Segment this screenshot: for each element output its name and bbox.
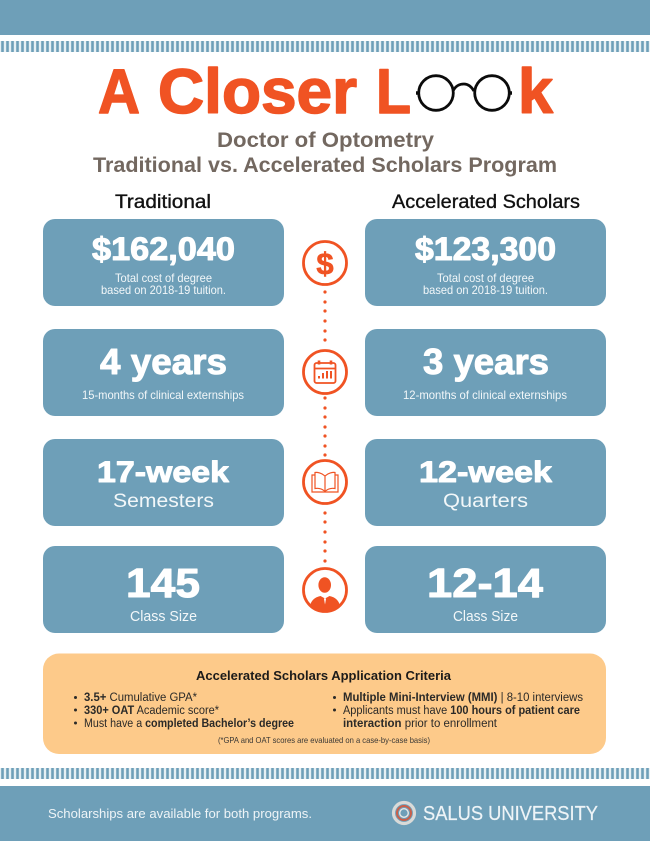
footer note: Scholarships are available for both programs. <box>48 806 312 821</box>
criteria right column <box>333 692 583 730</box>
column heading: Traditional: Traditional <box>115 192 211 213</box>
card: traditional semesters <box>43 439 284 526</box>
card: traditional cost: Total cost of degree <box>115 271 212 285</box>
column heading: Accelerated Scholars: Accelerated Scholars <box>392 192 580 213</box>
subtitle: Doctor of Optometry <box>217 129 434 152</box>
card: traditional class size: Class Size <box>130 608 197 625</box>
icon: glasses <box>416 76 512 110</box>
card: accelerated cost: $123,300 <box>415 231 556 267</box>
title: A <box>98 57 140 127</box>
criteria footnote: (*GPA and OAT scores are evaluated on a case-by-case basis) <box>218 735 430 745</box>
dotted connector <box>323 290 327 563</box>
icon: person <box>304 568 346 612</box>
title <box>98 57 554 127</box>
criteria heading: Accelerated Scholars Application Criteria <box>196 668 452 683</box>
icon: dollar <box>304 242 346 284</box>
card: traditional duration: 4 years <box>100 341 227 382</box>
card: accelerated cost <box>365 219 606 306</box>
card: accelerated cost: based on 2018-19 tuition. <box>423 283 548 297</box>
card: traditional cost <box>43 219 284 306</box>
card: accelerated quarters: Quarters <box>443 491 528 512</box>
card: traditional semesters: Semesters <box>113 491 214 512</box>
card: traditional semesters: 17-week <box>97 456 229 489</box>
card: traditional class size: 145 <box>126 560 200 606</box>
card: traditional cost: $162,040 <box>92 231 235 267</box>
card: traditional duration <box>43 329 284 416</box>
icon: book <box>304 460 346 504</box>
panel: application criteria <box>43 654 606 754</box>
title: Closer <box>158 57 357 127</box>
footer band <box>0 786 650 841</box>
criteria left column: 3.5+ Cumulative GPA* <box>84 692 198 704</box>
criteria left column: Must have a completed Bachelor’s degree <box>84 718 294 730</box>
icon: Salus logo <box>394 802 414 824</box>
card: accelerated quarters <box>365 439 606 526</box>
card: accelerated cost: Total cost of degree <box>437 271 534 285</box>
subtitle: Traditional vs. Accelerated Scholars Program <box>93 154 557 177</box>
title: k <box>518 57 554 127</box>
card: accelerated quarters: 12-week <box>419 456 552 489</box>
criteria right column: Applicants must have 100 hours of patient care <box>343 705 580 717</box>
criteria left column <box>74 692 294 730</box>
icon: dollar: $ <box>316 246 334 281</box>
logo wordmark: SALUS UNIVERSITY <box>423 803 598 825</box>
card: traditional class size <box>43 546 284 633</box>
card: accelerated duration <box>365 329 606 416</box>
card: accelerated duration: 3 years <box>423 341 549 382</box>
card: accelerated class size: 12-14 <box>427 560 543 606</box>
icon: calendar <box>304 350 346 394</box>
criteria left column: 330+ OAT Academic score* <box>84 705 219 717</box>
title: L <box>376 57 411 127</box>
card: traditional duration: 15-months of clinical externships <box>82 388 244 402</box>
card: accelerated class size: Class Size <box>453 608 518 625</box>
card: traditional cost: based on 2018-19 tuition. <box>101 283 226 297</box>
card: accelerated class size <box>365 546 606 633</box>
criteria right column: interaction prior to enrollment <box>343 718 498 730</box>
card: accelerated duration: 12-months of clinical externships <box>403 388 567 402</box>
subtitle <box>93 129 557 177</box>
criteria right column: Multiple Mini-Interview (MMI) | 8-10 interviews <box>343 692 583 704</box>
top band <box>0 0 650 35</box>
